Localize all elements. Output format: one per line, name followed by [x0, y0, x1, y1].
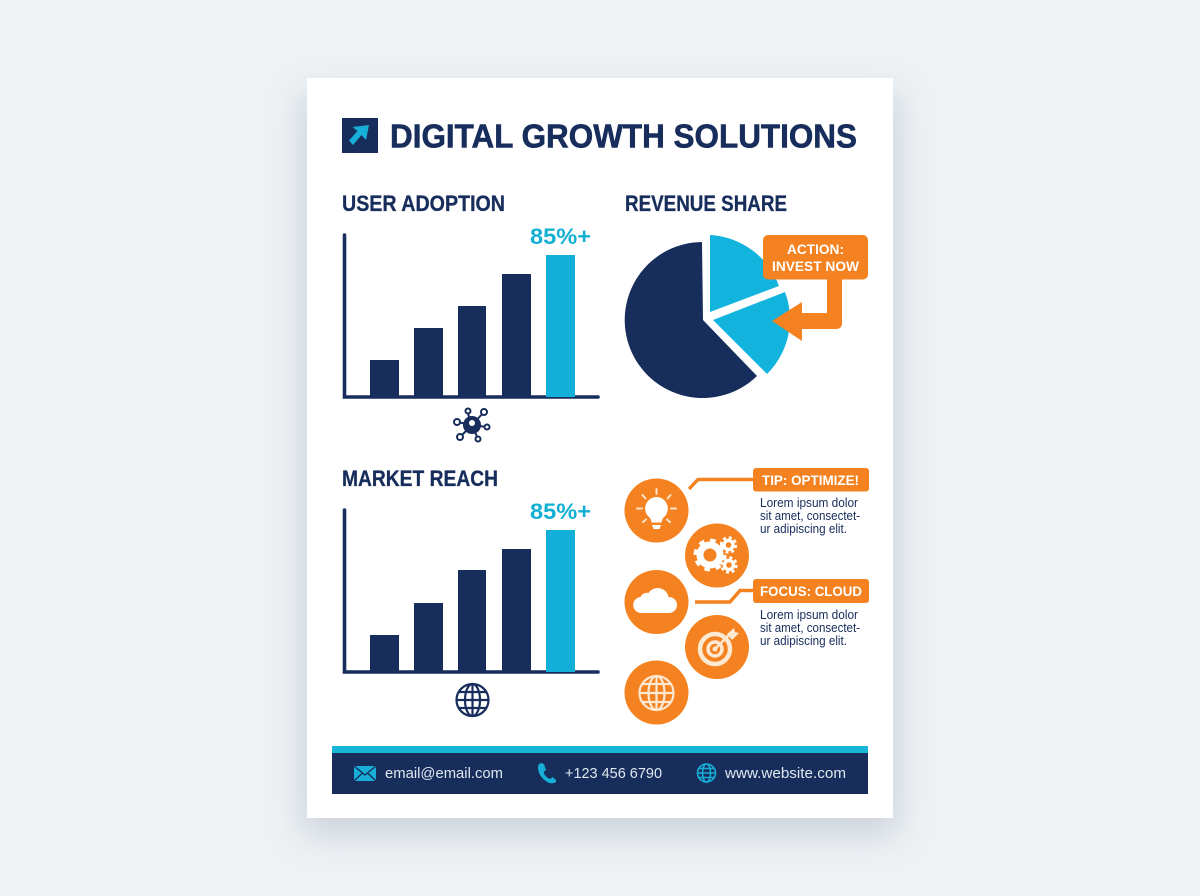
- focus text: [760, 608, 860, 648]
- phone number: +123 456 6790: [565, 765, 662, 782]
- connector: tip: [689, 480, 754, 489]
- focus text: ur adipiscing elit.: [760, 634, 847, 648]
- icon: phone: [538, 763, 556, 783]
- website: www.website.com: [724, 765, 846, 782]
- value label: 85%+: [530, 224, 591, 249]
- callout arrow: [772, 278, 842, 341]
- tip badge: TIP: OPTIMIZE!: [762, 472, 859, 488]
- pie chart: revenue share: [625, 235, 790, 398]
- footer bar: [332, 746, 868, 794]
- icon circle: cloud: [624, 570, 688, 634]
- callout: action: [763, 235, 868, 280]
- tip text: sit amet, consectet-: [760, 509, 860, 523]
- email: email@email.com: [385, 765, 503, 782]
- icon: network: [454, 408, 490, 442]
- title: DIGITAL GROWTH SOLUTIONS: [390, 118, 857, 154]
- slice: lower cyan: [713, 292, 790, 374]
- focus text: sit amet, consectet-: [760, 621, 860, 635]
- heading: revenue share: REVENUE SHARE: [625, 191, 787, 216]
- icon: globe: [456, 684, 488, 716]
- callout: action: ACTION:: [787, 241, 844, 257]
- card shadow: [303, 94, 897, 834]
- slice: top cyan: [710, 235, 779, 312]
- icon circle: gears: [685, 524, 749, 588]
- slice: navy: [625, 242, 757, 398]
- focus text: Lorem ipsum dolor: [760, 608, 858, 622]
- icon circle: target: [685, 615, 749, 679]
- icon circle: light bulb: [624, 478, 688, 542]
- icon: mail: [354, 766, 376, 781]
- value label: 85%+: [530, 499, 591, 524]
- tip text: Lorem ipsum dolor: [760, 496, 858, 510]
- focus badge: [753, 579, 869, 603]
- callout: action: INVEST NOW: [772, 258, 860, 274]
- focus badge: FOCUS: CLOUD: [760, 583, 862, 599]
- icon: web: [698, 764, 716, 782]
- bar chart: market reach: [344, 499, 598, 673]
- heading: user adoption: USER ADOPTION: [342, 191, 505, 216]
- connector: focus: [695, 590, 754, 602]
- tip text: [760, 496, 860, 536]
- tip text: ur adipiscing elit.: [760, 522, 847, 536]
- tip badge: [753, 468, 869, 492]
- poster panel: [307, 78, 893, 818]
- heading: market reach: MARKET REACH: [342, 466, 498, 491]
- title icon: growth arrow: [342, 118, 378, 153]
- icon circle: globe: [624, 660, 688, 724]
- bar chart: user adoption: [344, 224, 598, 398]
